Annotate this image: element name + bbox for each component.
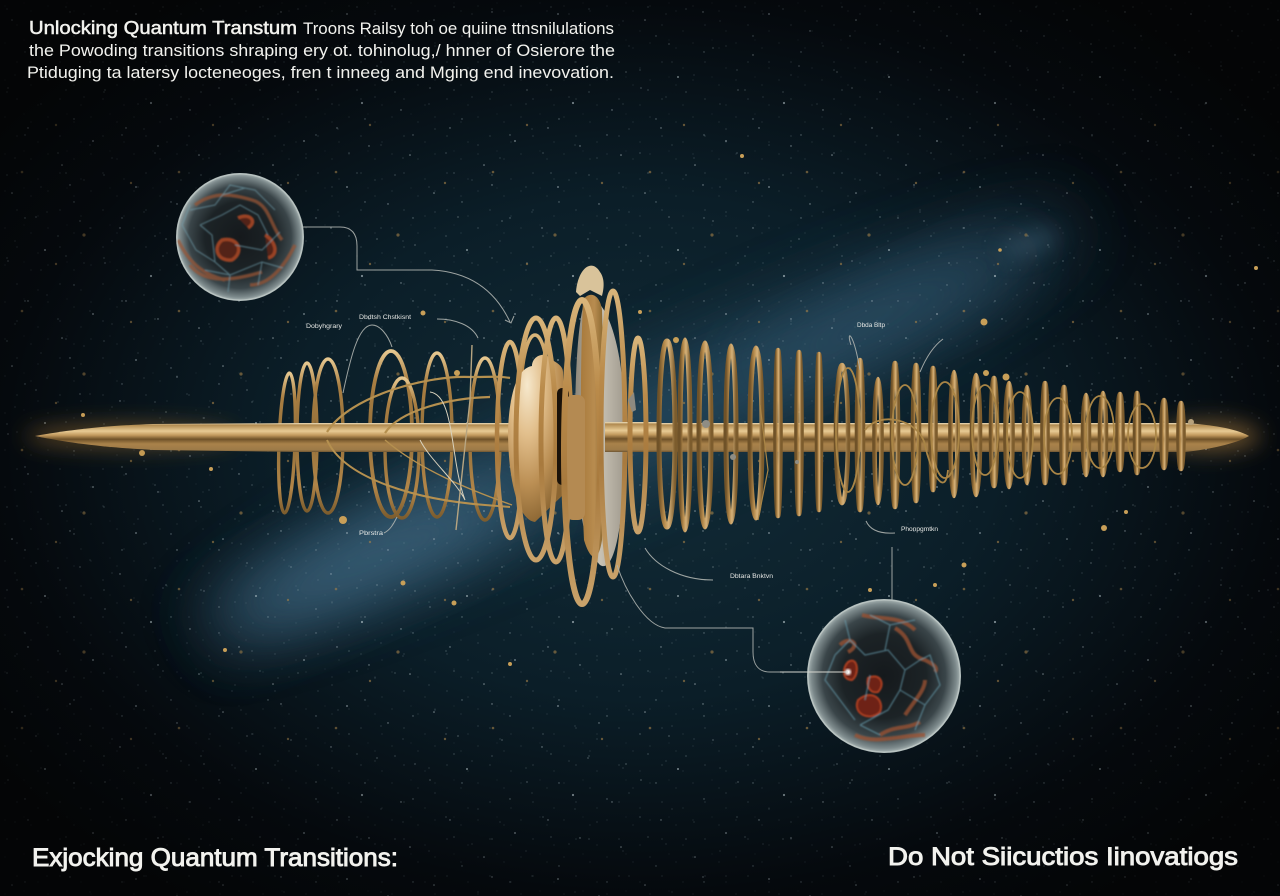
small callout labels: Dobyhgrary [306,323,343,330]
rod emerging from plate [605,422,660,452]
title text block: Ptiduging ta latersy locteneoges, fren t inneeg and Mging end inevovation. [27,63,614,82]
sphere: lower right [780,599,961,753]
connector lines [300,227,943,672]
rod glow [25,421,1260,451]
silver and gold plate [575,299,625,566]
central disc assembly [497,266,660,604]
small callout labels: Dbdtsh Chstkisnt [359,314,411,321]
title text block: Unlocking Quantum Transtum [29,18,297,38]
cream bulb body [508,355,563,522]
sphere: upper left [176,173,304,301]
golden rod with pointed tips [35,423,1249,452]
small callout labels: Dbda Bltp [857,322,885,329]
small callout labels: Pbrstra [359,530,383,537]
tall narrow coils on the right of the spindle [659,340,1184,530]
back rings [497,335,549,538]
thin entangled wires and beads [702,368,1194,520]
title text block: the Powoding transitions shraping ery ot. tohinoluɡ,/ hnner of Osierore the [29,41,615,60]
title text block: Troons Railsy toh oe quiine ttnsnilulations [303,19,614,38]
bottom left heading: Exjocking Quantum Transitions: [32,844,398,872]
small callout labels [306,314,938,580]
tilted wire loops on the left [327,345,512,530]
back coils on the left of the spindle [277,351,500,520]
title text block [27,18,615,82]
small callout labels: Dbtara Bnktvn [730,573,773,580]
small callout labels: Phonpgmtkn [901,526,938,533]
bottom right heading: Do Not Siicuctios Iinovatiogs [888,843,1238,871]
front rings around the bulb [516,318,571,562]
